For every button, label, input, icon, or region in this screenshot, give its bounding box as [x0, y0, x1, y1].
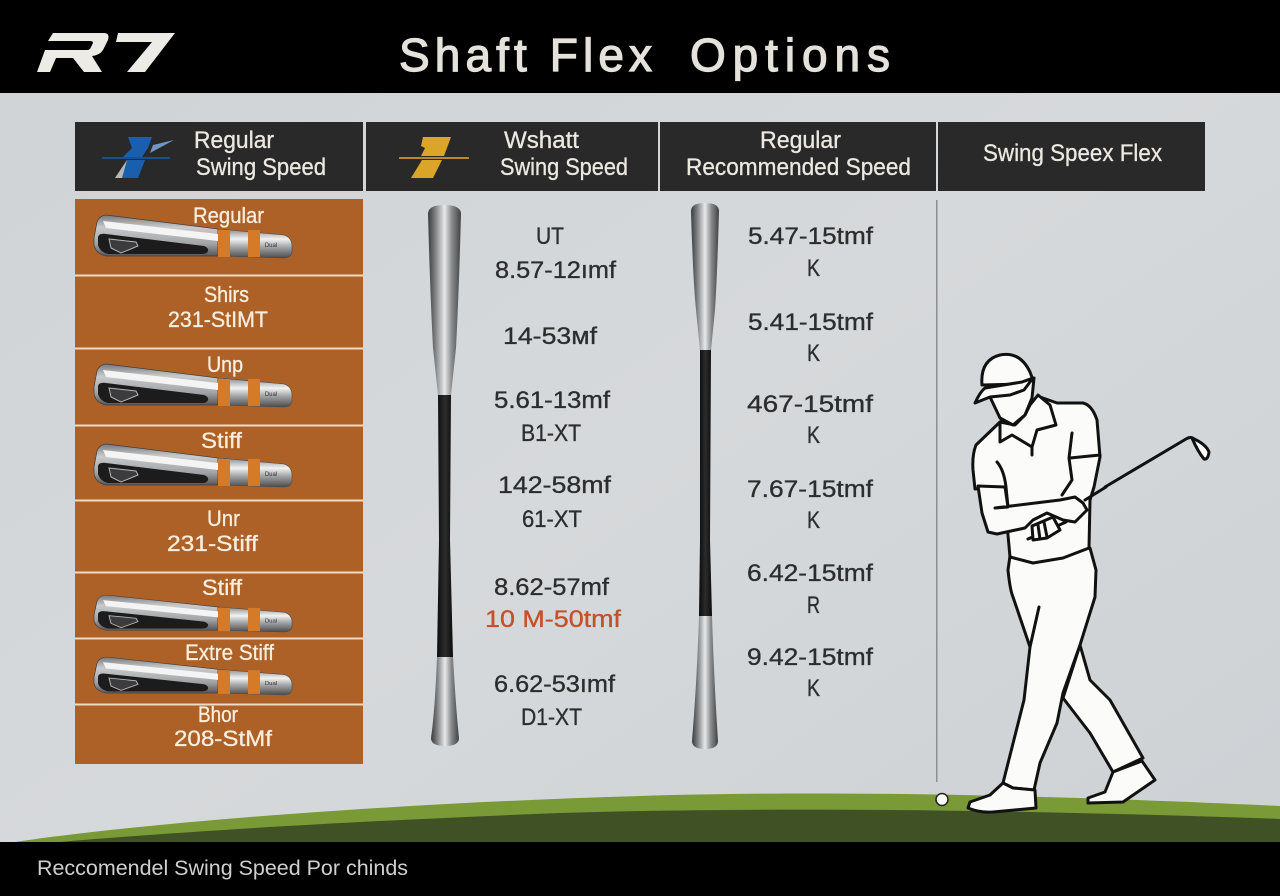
column: shaft speeds: 8.62-57mf — [494, 574, 609, 601]
top header bar — [0, 0, 1280, 93]
icon: gold flex mark — [399, 137, 469, 178]
title — [399, 29, 890, 81]
title: Options — [690, 29, 890, 81]
header cell: shaft swing speed — [366, 122, 658, 191]
column: shaft speeds: 6.62-53ımf — [494, 671, 615, 698]
footer note: Reccomendel Swing Speed Por chinds — [37, 857, 408, 880]
header cell: recommended speed: Recommended Speed — [686, 154, 911, 181]
icon: blue flex mark — [102, 137, 174, 178]
row labels: Stiff — [202, 575, 243, 600]
header cell: recommended speed — [660, 122, 936, 191]
row labels — [167, 203, 275, 751]
club head: row 3 — [94, 364, 292, 407]
column: shaft speeds: 61-XT — [522, 506, 582, 533]
header cell: swing speed flex — [938, 122, 1205, 191]
column: recommended speeds: 5.41-15tmf — [748, 309, 873, 336]
club head: row 7 — [94, 657, 292, 695]
club head: row 1 — [94, 215, 292, 258]
column: recommended speeds: K — [807, 340, 821, 367]
back leg and shoe — [1063, 645, 1155, 803]
row labels: Extre Stiff — [185, 640, 275, 665]
column: recommended speeds — [747, 223, 873, 702]
row labels: 231-StIMT — [168, 307, 268, 332]
header cell: regular swing speed — [75, 122, 363, 191]
column: shaft speeds: 142-58mf — [498, 472, 611, 499]
row labels: Shirs — [204, 282, 249, 307]
torso and shirt — [973, 397, 1100, 563]
row labels: Stiff — [201, 428, 243, 453]
column: recommended speeds: 6.42-15tmf — [747, 560, 873, 587]
ground: grass hill — [15, 793, 1280, 842]
arm — [978, 486, 1087, 534]
column: shaft speeds: UT — [536, 223, 564, 250]
illustration: golfer — [968, 354, 1209, 812]
club head: row 6 — [94, 595, 292, 632]
row labels: Unr — [207, 506, 240, 531]
header cell: regular swing speed: Swing Speed — [196, 154, 326, 181]
column: recommended speeds: K — [807, 507, 821, 534]
shaft illustration: right — [691, 203, 719, 749]
logo: R7 — [37, 33, 175, 72]
collar — [1000, 395, 1056, 455]
header cell: swing speed flex: Swing Speex Flex — [983, 140, 1162, 167]
hand — [1032, 517, 1060, 540]
column: recommended speeds: K — [807, 255, 821, 282]
title: Shaft Flex — [399, 29, 652, 81]
club: shaft, grip and head — [1028, 438, 1209, 539]
front leg and shoe — [968, 548, 1096, 812]
column: recommended speeds: 467-15tmf — [747, 391, 873, 418]
footer bar — [0, 842, 1280, 896]
column: recommended speeds: R — [807, 592, 820, 619]
row labels: 208-StMf — [174, 726, 273, 751]
column: shaft speeds: B1-XT — [521, 420, 581, 447]
column: shaft speeds — [485, 223, 621, 731]
header cell: recommended speed: Regular — [760, 127, 841, 154]
row labels: Regular — [193, 203, 264, 228]
panel: flex list — [75, 199, 363, 764]
row labels: Unp — [207, 352, 243, 377]
column: recommended speeds: 9.42-15tmf — [747, 644, 873, 671]
golf ball — [936, 794, 948, 806]
header cell: shaft swing speed: Wshatt — [504, 127, 579, 154]
head and cap — [975, 354, 1034, 425]
column: shaft speeds: 10 M-50tmf — [485, 606, 621, 633]
row labels: Bhor — [198, 702, 238, 727]
column: shaft speeds: 5.61-13mf — [494, 387, 610, 414]
column: shaft speeds: 14-53мf — [503, 323, 597, 350]
shaft illustration: left — [428, 205, 461, 746]
column: shaft speeds: D1-XT — [521, 704, 582, 731]
row labels: 231-Stiff — [167, 531, 259, 556]
header cell: shaft swing speed: Swing Speed — [500, 154, 628, 181]
header cell: regular swing speed: Regular — [194, 127, 274, 154]
column: recommended speeds: 5.47-15tmf — [748, 223, 873, 250]
club head: row 4 — [94, 444, 292, 487]
column: recommended speeds: 7.67-15tmf — [747, 476, 873, 503]
column: recommended speeds: K — [807, 675, 821, 702]
column: shaft speeds: 8.57-12ımf — [495, 257, 616, 284]
column: recommended speeds: K — [807, 422, 821, 449]
header row — [75, 122, 1205, 191]
